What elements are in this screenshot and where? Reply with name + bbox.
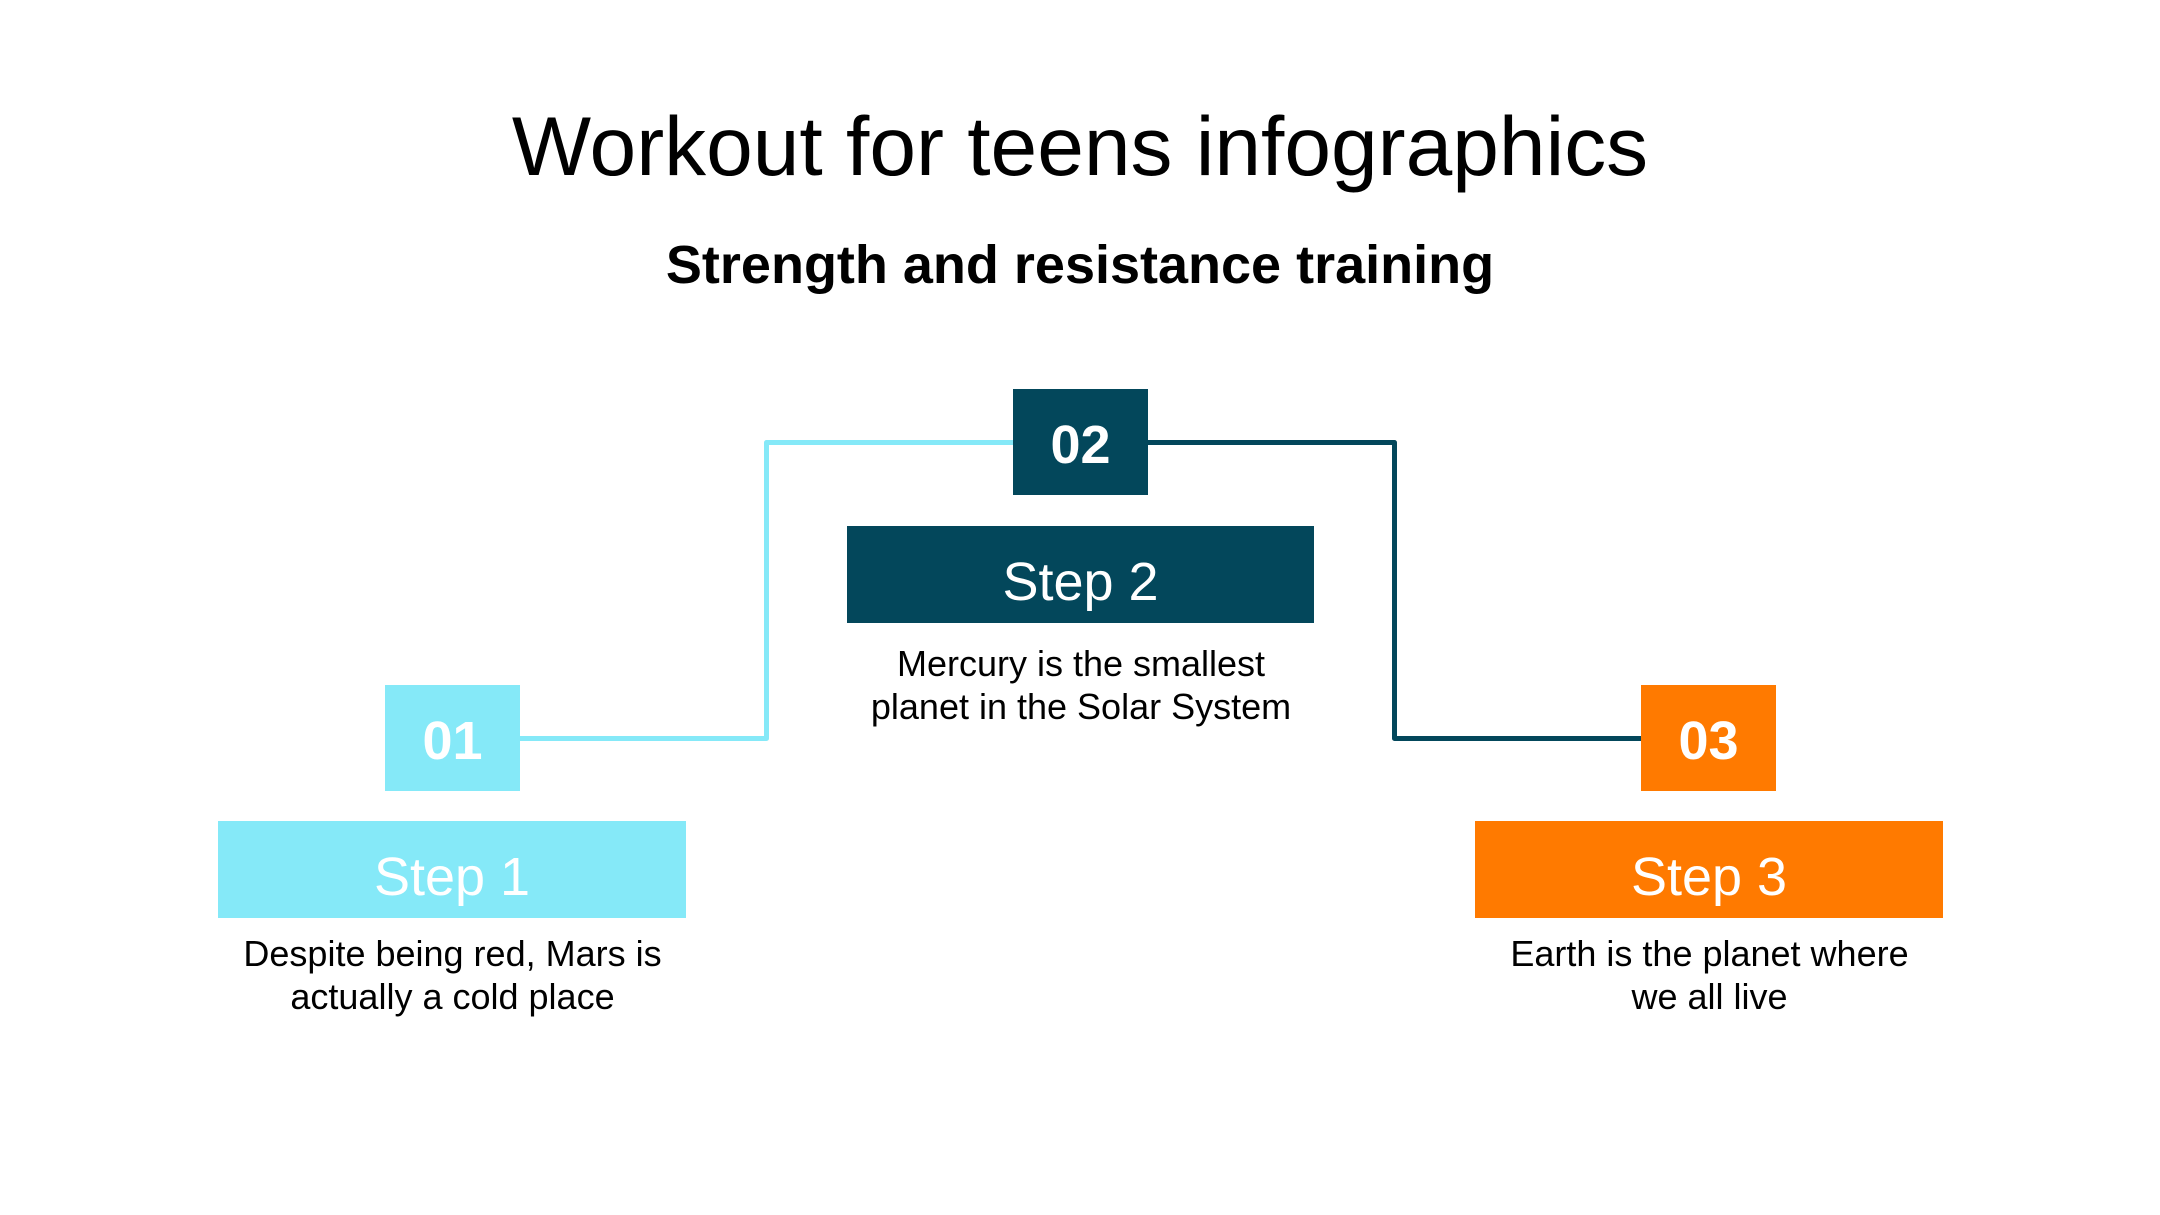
step 1 description <box>243 933 662 1017</box>
step 1 description: Despite being red, Mars is <box>243 933 662 974</box>
step 2 description: Mercury is the smallest <box>897 643 1265 684</box>
connector: step 2 to step 3 <box>1148 440 1641 741</box>
connector: step 1 to step 2 <box>520 440 1013 741</box>
step 3 label bar: Step 3 <box>1631 846 1787 906</box>
step 3 description: Earth is the planet where <box>1510 933 1909 974</box>
step 3 description <box>1510 933 1909 1017</box>
title: Workout for teens infographics <box>512 99 1648 193</box>
step 2 label bar <box>847 526 1314 623</box>
number badge 01: 01 <box>422 710 483 770</box>
step 1 description: actually a cold place <box>290 976 615 1017</box>
number badge 02: 02 <box>1050 414 1111 474</box>
step 3 description: we all live <box>1631 976 1788 1017</box>
panel: step 3 <box>1475 685 1943 1017</box>
panel: step 2 <box>847 389 1314 727</box>
subtitle: Strength and resistance training <box>666 235 1494 295</box>
step 1 label bar: Step 1 <box>374 846 530 906</box>
number badge 03: 03 <box>1678 710 1739 770</box>
number badge 02 <box>1013 389 1148 495</box>
step 2 description <box>871 643 1291 727</box>
step 2 label bar: Step 2 <box>1002 552 1159 612</box>
step 1 label bar <box>218 821 686 918</box>
panel: step 1 <box>218 685 686 1017</box>
step 3 label bar <box>1475 821 1943 918</box>
number badge 01 <box>385 685 520 791</box>
number badge 03 <box>1641 685 1776 791</box>
step 2 description: planet in the Solar System <box>871 686 1291 727</box>
